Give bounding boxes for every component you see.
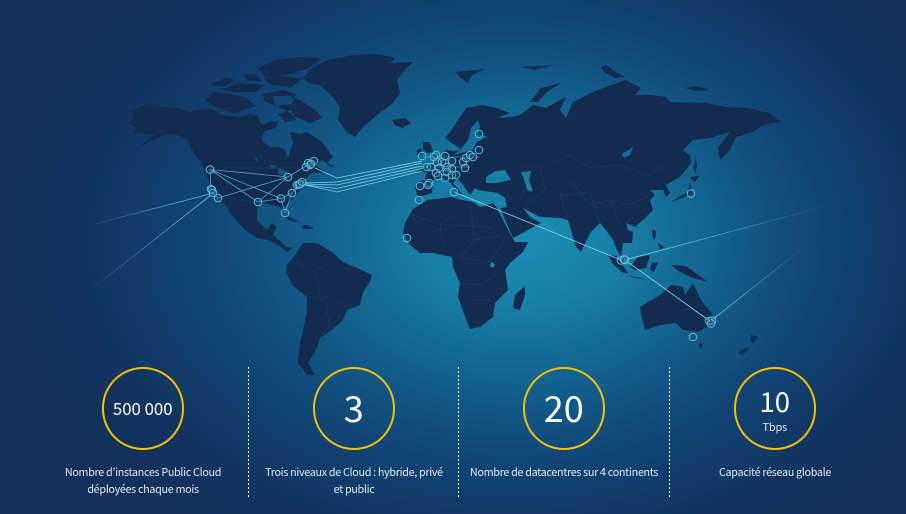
arctic russia islands: [455, 65, 710, 102]
circle: 10 Tbps: [734, 367, 816, 450]
arctic islands: [205, 57, 322, 123]
faded long-haul links: [83, 194, 830, 320]
caption: network capacity: Capacité réseau globale: [719, 464, 831, 480]
sakhalin and japan: [671, 155, 700, 202]
australia: [640, 283, 713, 332]
eurasia: [415, 80, 780, 257]
north america links: [210, 161, 314, 213]
tasmania and new zealand: [698, 335, 758, 355]
borders: [223, 155, 665, 338]
southeast asia islands: [608, 229, 708, 282]
caption: cloud levels: [265, 464, 443, 497]
stat: network capacity: [719, 367, 831, 480]
africa: [403, 197, 528, 329]
circle: 3: [312, 367, 395, 450]
circle: 20: [522, 367, 605, 450]
stat: instances: [65, 367, 221, 497]
stat: datacentres: [470, 367, 658, 480]
circle: 10 Tbps: Tbps: [762, 418, 787, 434]
caribbean: [282, 215, 314, 229]
circle: 500 000: [102, 367, 184, 450]
madagascar: [513, 286, 525, 310]
network lines: [83, 157, 830, 322]
circle: 500 000: 500 000: [113, 396, 173, 420]
caption: cloud levels: Trois niveaux de Cloud : hybride, privé: [265, 464, 443, 480]
continents: [128, 54, 780, 375]
divider: [669, 367, 670, 498]
caption: cloud levels: et public: [334, 481, 374, 497]
circle: 20: 20: [544, 381, 584, 433]
circle: 3: 3: [344, 381, 364, 433]
iceland: [392, 118, 411, 128]
caption: datacentres: Nombre de datacentres sur 4 continents: [470, 464, 658, 480]
british isles: [417, 142, 433, 155]
atlantic links: [305, 161, 422, 192]
caption: instances: [65, 464, 221, 497]
datacentre markers: [206, 130, 716, 341]
circle: 10 Tbps: 10: [759, 380, 790, 420]
greenland: [303, 54, 413, 137]
north america: [128, 104, 337, 252]
caption: instances: Nombre d’instances Public Cloud: [65, 464, 221, 480]
stat: cloud levels: [265, 367, 443, 497]
divider: [248, 367, 249, 498]
divider: [458, 367, 459, 498]
south america: [286, 243, 372, 375]
caption: instances: déployées chaque mois: [87, 481, 199, 497]
asia and pacific links: [454, 192, 711, 322]
